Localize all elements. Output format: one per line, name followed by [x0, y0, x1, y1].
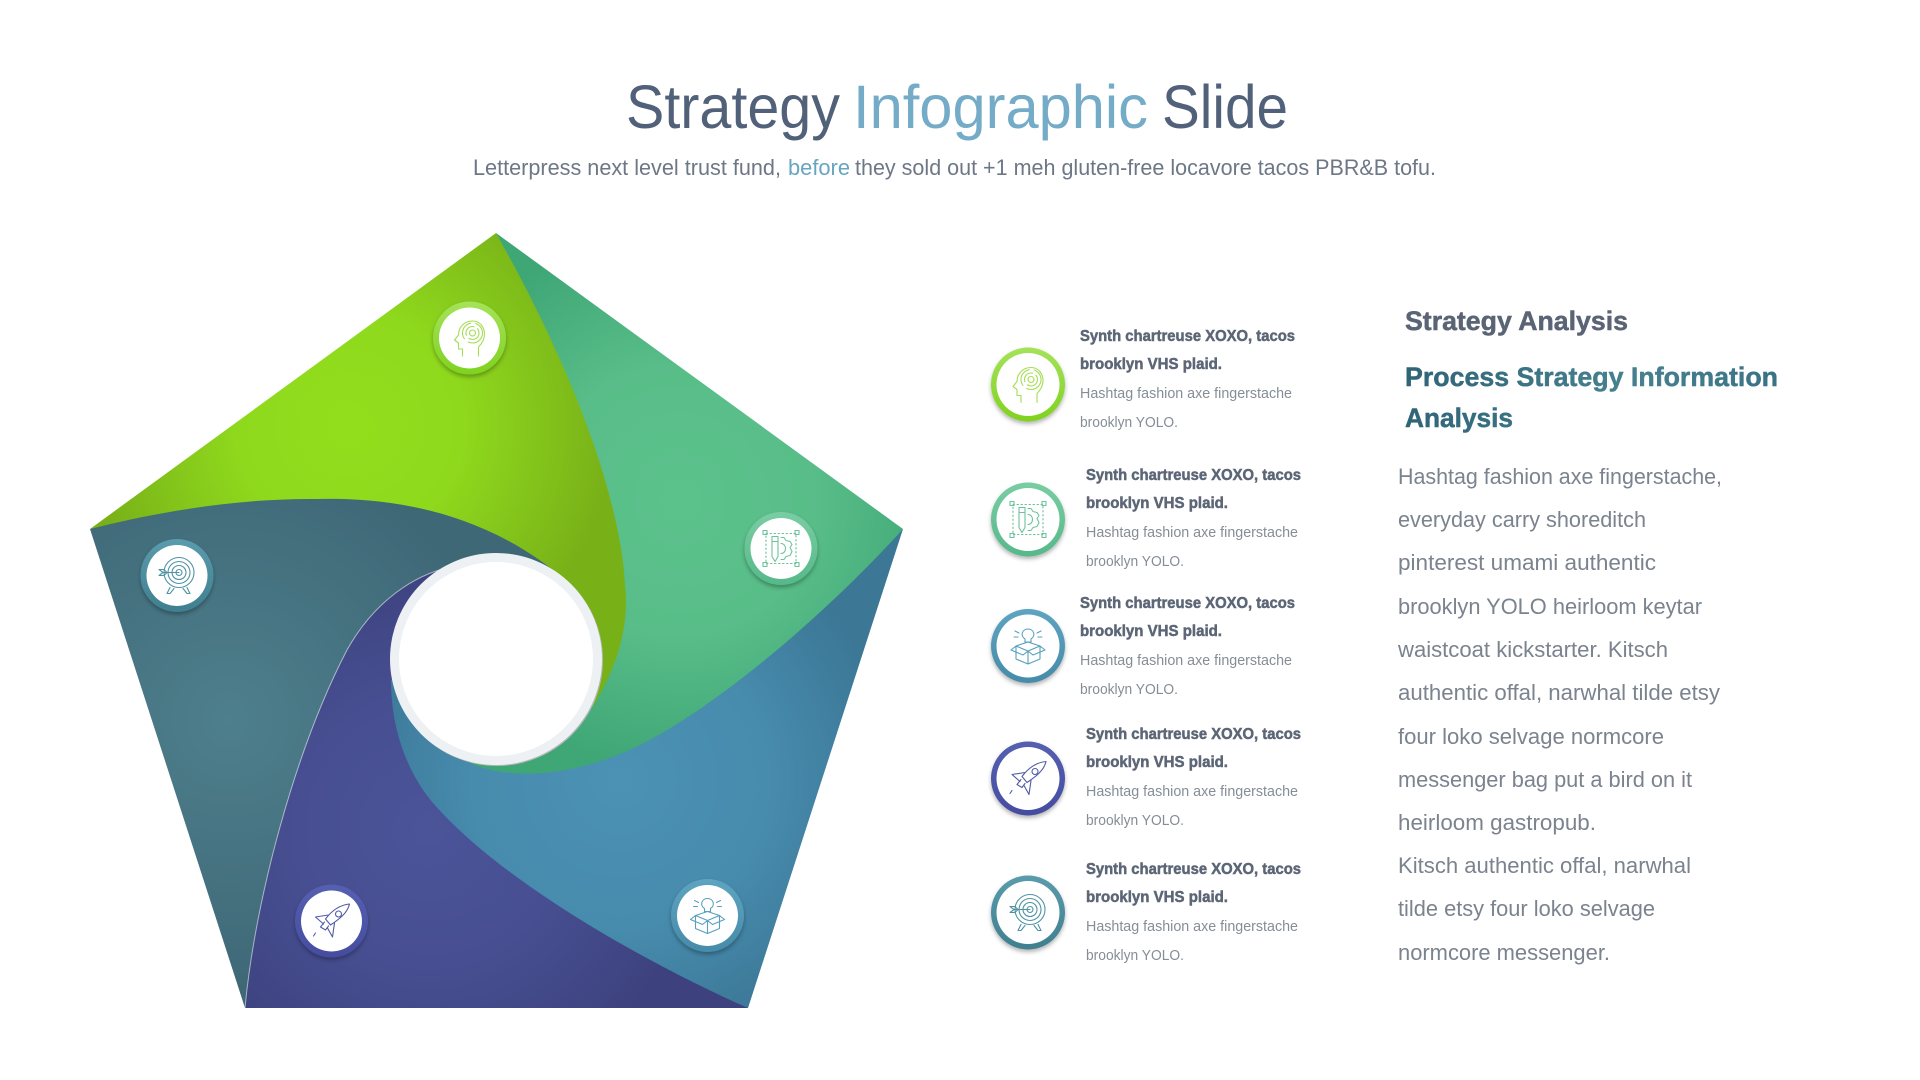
list item 4: Hashtag fashion axe fingerstache — [1086, 783, 1298, 800]
list item 1 — [991, 328, 1295, 431]
subtitle — [473, 155, 1436, 180]
center circle — [390, 553, 603, 766]
list item 4: brooklyn VHS plaid. — [1086, 754, 1228, 771]
segment: blue — [391, 529, 903, 1008]
body paragraph: normcore messenger. — [1398, 940, 1610, 965]
subtitle: they sold out +1 meh gluten-free locavore tacos PBR&B tofu. — [855, 155, 1436, 180]
list item 2: brooklyn VHS plaid. — [1086, 495, 1228, 512]
subtitle: before — [788, 155, 850, 180]
body paragraph — [1397, 464, 1722, 965]
pentagon swirl diagram — [90, 233, 903, 1008]
icon: rocket — [991, 742, 1065, 816]
badge: gear and pencil — [744, 512, 818, 585]
list item 4: brooklyn YOLO. — [1086, 812, 1184, 829]
list item 3 — [991, 595, 1295, 698]
list item 5: Hashtag fashion axe fingerstache — [1086, 918, 1298, 935]
title: Slide — [1162, 73, 1288, 141]
list item 4 — [991, 726, 1301, 829]
list item 1: brooklyn VHS plaid. — [1080, 356, 1222, 373]
heading: process strategy information analysis — [1405, 362, 1778, 433]
list item 2 — [991, 467, 1301, 570]
list item 5 — [991, 861, 1301, 964]
list item 2: Hashtag fashion axe fingerstache — [1086, 524, 1298, 541]
list item 4: Synth chartreuse XOXO, tacos — [1086, 726, 1301, 743]
icon: idea box — [991, 609, 1065, 683]
edge highlight: purple — [245, 567, 450, 1008]
body paragraph: brooklyn YOLO heirloom keytar — [1398, 594, 1702, 619]
body paragraph: waistcoat kickstarter. Kitsch — [1397, 637, 1668, 662]
segment: mint — [470, 233, 903, 774]
icon: head — [991, 348, 1065, 422]
title — [626, 73, 1288, 141]
list item 5: brooklyn VHS plaid. — [1086, 889, 1228, 906]
list item 3: brooklyn YOLO. — [1080, 681, 1178, 698]
body paragraph: four loko selvage normcore — [1398, 724, 1664, 749]
title: Strategy — [626, 73, 840, 141]
list item 2: Synth chartreuse XOXO, tacos — [1086, 467, 1301, 484]
segment: slate — [90, 470, 570, 1008]
heading: strategy analysis: Strategy Analysis — [1405, 306, 1628, 336]
list item 3: brooklyn VHS plaid. — [1080, 623, 1222, 640]
icon: gear and pencil — [991, 482, 1065, 556]
body paragraph: everyday carry shoreditch — [1398, 507, 1646, 532]
heading: process strategy information analysis: Analysis — [1405, 403, 1513, 433]
body paragraph: tilde etsy four loko selvage — [1398, 896, 1655, 921]
subtitle: Letterpress next level trust fund, — [473, 155, 781, 180]
title: Infographic — [853, 73, 1148, 141]
badge: idea box — [671, 879, 744, 952]
list item 3: Synth chartreuse XOXO, tacos — [1080, 595, 1295, 612]
heading: process strategy information analysis: Process Strategy Information — [1405, 362, 1778, 392]
body paragraph: Kitsch authentic offal, narwhal — [1398, 853, 1691, 878]
body paragraph: messenger bag put a bird on it — [1398, 767, 1692, 792]
segment: slate overlap at circle — [420, 500, 590, 660]
list item 3: Hashtag fashion axe fingerstache — [1080, 652, 1292, 669]
list item 1: Synth chartreuse XOXO, tacos — [1080, 328, 1295, 345]
body paragraph: pinterest umami authentic — [1398, 550, 1656, 575]
badge: head — [433, 302, 506, 374]
badge: target — [140, 539, 214, 612]
body paragraph: authentic offal, narwhal tilde etsy — [1398, 680, 1720, 705]
list item 5: Synth chartreuse XOXO, tacos — [1086, 861, 1301, 878]
segment: purple — [245, 567, 748, 1008]
badge: rocket — [295, 884, 368, 958]
segment: lime — [90, 233, 626, 708]
body paragraph: heirloom gastropub. — [1398, 810, 1596, 835]
list item 1: brooklyn YOLO. — [1080, 414, 1178, 431]
list item 1: Hashtag fashion axe fingerstache — [1080, 385, 1292, 402]
body paragraph: Hashtag fashion axe fingerstache, — [1398, 464, 1722, 489]
list item 5: brooklyn YOLO. — [1086, 947, 1184, 964]
icon: target — [991, 876, 1065, 950]
list item 2: brooklyn YOLO. — [1086, 553, 1184, 570]
